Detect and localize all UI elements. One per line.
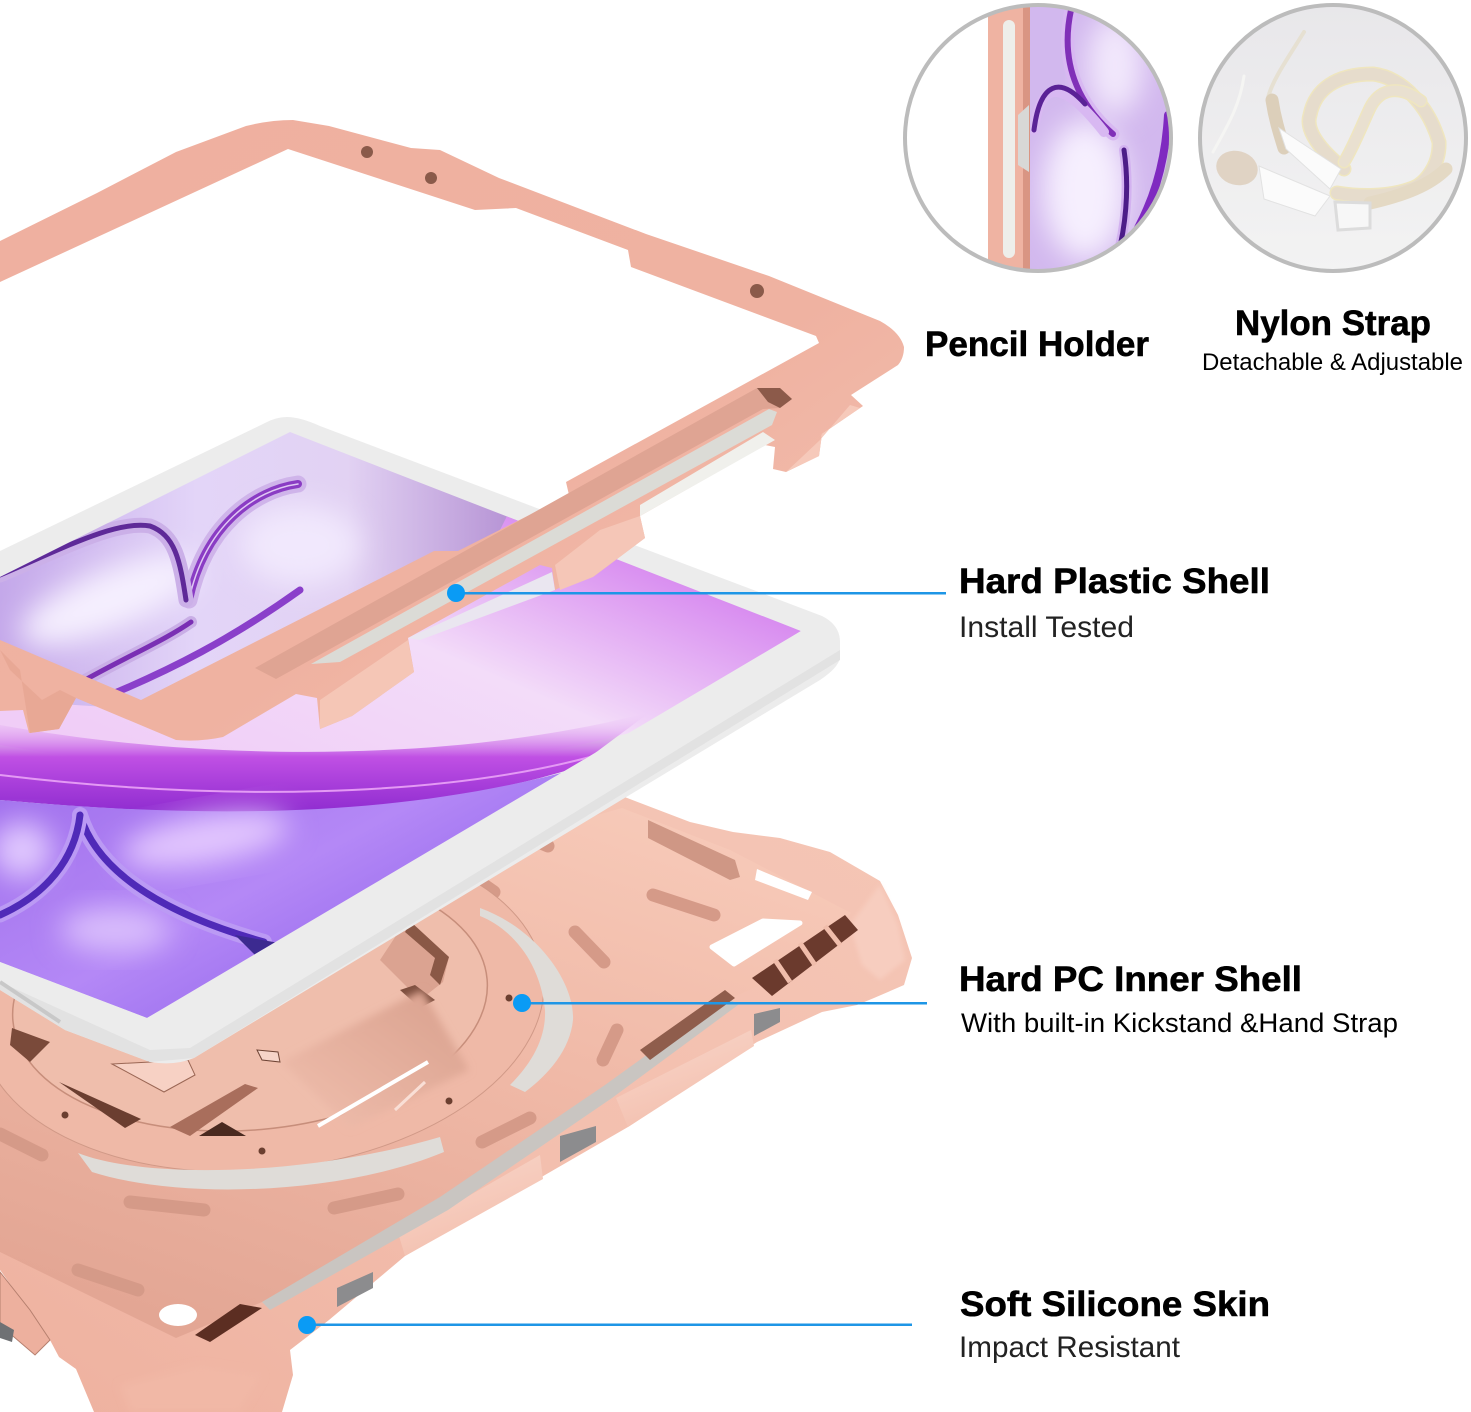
- left clip piece: [0, 1272, 50, 1355]
- ring screws: [62, 994, 512, 1154]
- left clip shading: [0, 650, 76, 733]
- heading: hard plastic shell: Hard Plastic Shell: [959, 561, 1270, 601]
- callout line: hard pc inner shell: [513, 994, 927, 1012]
- recess slot with white highlights: [282, 990, 469, 1128]
- violet Y shape: [0, 815, 264, 942]
- strap tails: [1268, 32, 1304, 98]
- pencil slot grey strip: [311, 409, 777, 664]
- bottom-left grid: [195, 1304, 262, 1342]
- heading: pencil holder: Pencil Holder: [925, 324, 1149, 364]
- front frame: hard plastic shell: [0, 120, 904, 741]
- inset clip: [1018, 105, 1029, 172]
- rim tubes: [616, 1030, 754, 1127]
- bottom-left hole: [159, 1304, 197, 1326]
- strap pad: [1212, 146, 1262, 190]
- heading: hard pc inner shell: Hard PC Inner Shell: [959, 959, 1302, 999]
- frame body: [0, 120, 904, 741]
- inset ribbons: [1034, 10, 1168, 258]
- inset pencil: [1003, 20, 1015, 258]
- top-right hole: [712, 921, 800, 964]
- buckles: [1279, 128, 1341, 189]
- top edge bracket: [648, 820, 740, 880]
- channel: grey inner strip: [262, 997, 738, 1310]
- violet lower area: [0, 765, 590, 1018]
- inner plate: [0, 808, 851, 1338]
- grey arcs: [480, 908, 573, 1092]
- tablet: [0, 417, 840, 1063]
- violet lobes: [117, 802, 293, 878]
- bezel lower edge: [0, 650, 840, 1062]
- white gap: [640, 432, 775, 516]
- strap loops: [1309, 74, 1439, 196]
- screen wallpaper: [0, 420, 801, 1018]
- top-right grid: [752, 915, 858, 996]
- callout line: soft silicone skin: [298, 1316, 912, 1334]
- tablet bezel: [0, 417, 840, 1063]
- heading: soft silicone skin: Soft Silicone Skin: [960, 1284, 1270, 1324]
- inset: nylon strap: [1200, 5, 1466, 271]
- recess shadows: [380, 922, 449, 1000]
- pill slots: [0, 843, 714, 1290]
- bumper silhouette: [0, 796, 912, 1412]
- soft highlights: [10, 546, 194, 658]
- inner recess: [2, 850, 498, 1150]
- side highlights: [0, 982, 60, 1022]
- back shell: soft silicone skin: [0, 796, 912, 1412]
- ribbon Y: [0, 484, 300, 695]
- caption: kickstand and hand strap: With built-in Kickstand &Hand Strap: [961, 1008, 1398, 1038]
- lower clip highlight: [555, 516, 645, 590]
- inset: pencil holder: [905, 0, 1175, 275]
- inset rose strip: [988, 8, 1023, 268]
- caption: detachable and adjustable: Detachable & Adjustable: [1202, 349, 1463, 376]
- inset screen: [1030, 0, 1175, 275]
- rotating ring: [0, 811, 561, 1199]
- callout line: hard plastic shell: [447, 584, 946, 602]
- caption: impact resistant: Impact Resistant: [959, 1331, 1180, 1364]
- ports: [754, 1008, 780, 1036]
- heading: nylon strap: Nylon Strap: [1235, 303, 1431, 343]
- thin highlight line: [0, 757, 590, 792]
- frame screw holes: [361, 146, 764, 298]
- lavender upper area: [0, 432, 518, 706]
- caption: install tested: Install Tested: [959, 611, 1134, 644]
- pencil recess: [255, 388, 792, 679]
- magenta sweep: [0, 516, 800, 752]
- dark channel edge: [640, 990, 735, 1060]
- purple lower band: [0, 722, 636, 812]
- dark wedge: [235, 935, 276, 954]
- corner highlights: [850, 885, 905, 980]
